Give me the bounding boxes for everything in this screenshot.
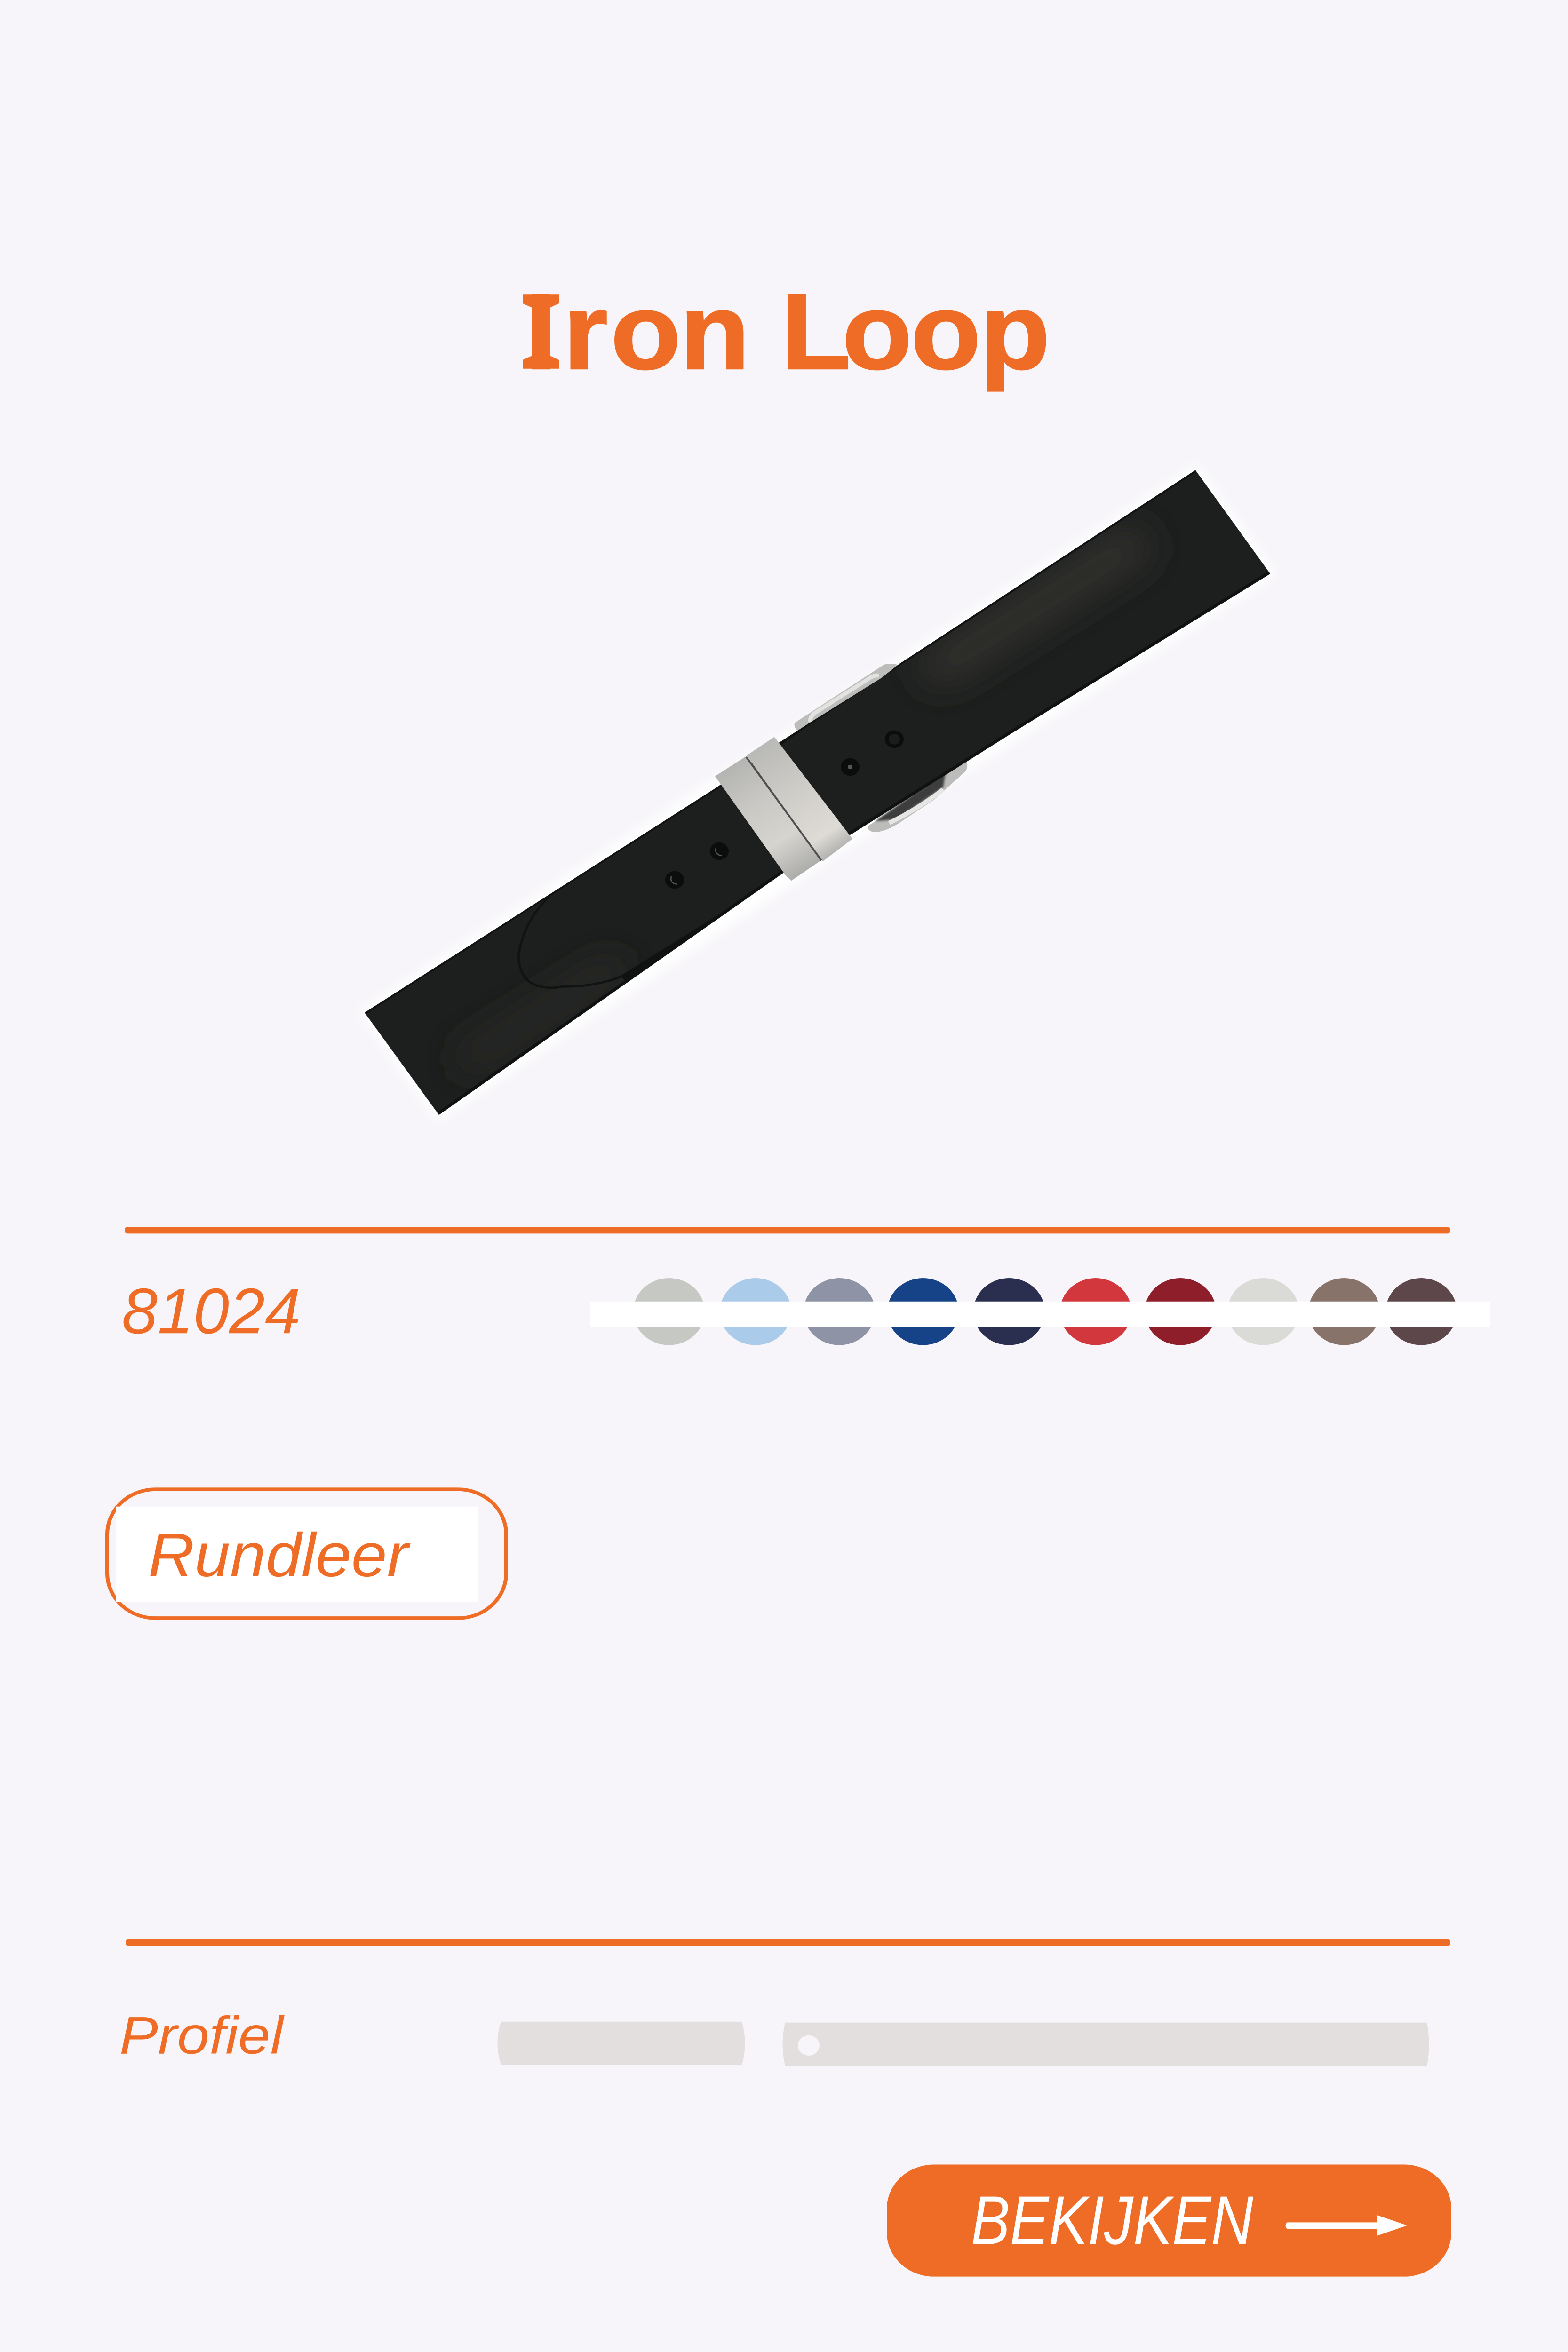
icon: arrow — [1285, 2215, 1407, 2235]
metal keeper upper — [747, 737, 852, 861]
buckle loop top — [795, 664, 899, 732]
infographic canvas — [105, 294, 1490, 2277]
buckle loop bottom — [868, 761, 967, 832]
keeper seam — [746, 757, 821, 860]
colour swatches — [590, 1278, 1490, 1345]
article number: 81024 — [122, 1275, 301, 1347]
strap holes — [665, 731, 904, 889]
button: bekijken — [887, 2165, 1451, 2277]
divider bottom — [126, 1939, 1450, 1946]
title: Iron Loop — [525, 272, 1050, 392]
metal keeper lower — [715, 757, 821, 881]
product photo: black leather watch strap — [365, 470, 1270, 1115]
material tag — [107, 1489, 506, 1618]
soft photo halo — [365, 470, 1270, 1115]
profile label: Profiel — [119, 2006, 285, 2065]
strap body — [365, 470, 1270, 1115]
divider top — [125, 1227, 1450, 1233]
profile diagram — [498, 2022, 1429, 2066]
strap shading — [365, 470, 1270, 1115]
material tag: Rundleer — [148, 1520, 411, 1589]
white band over swatches — [590, 1302, 1490, 1327]
button: bekijken: BEKIJKEN — [971, 2182, 1254, 2259]
